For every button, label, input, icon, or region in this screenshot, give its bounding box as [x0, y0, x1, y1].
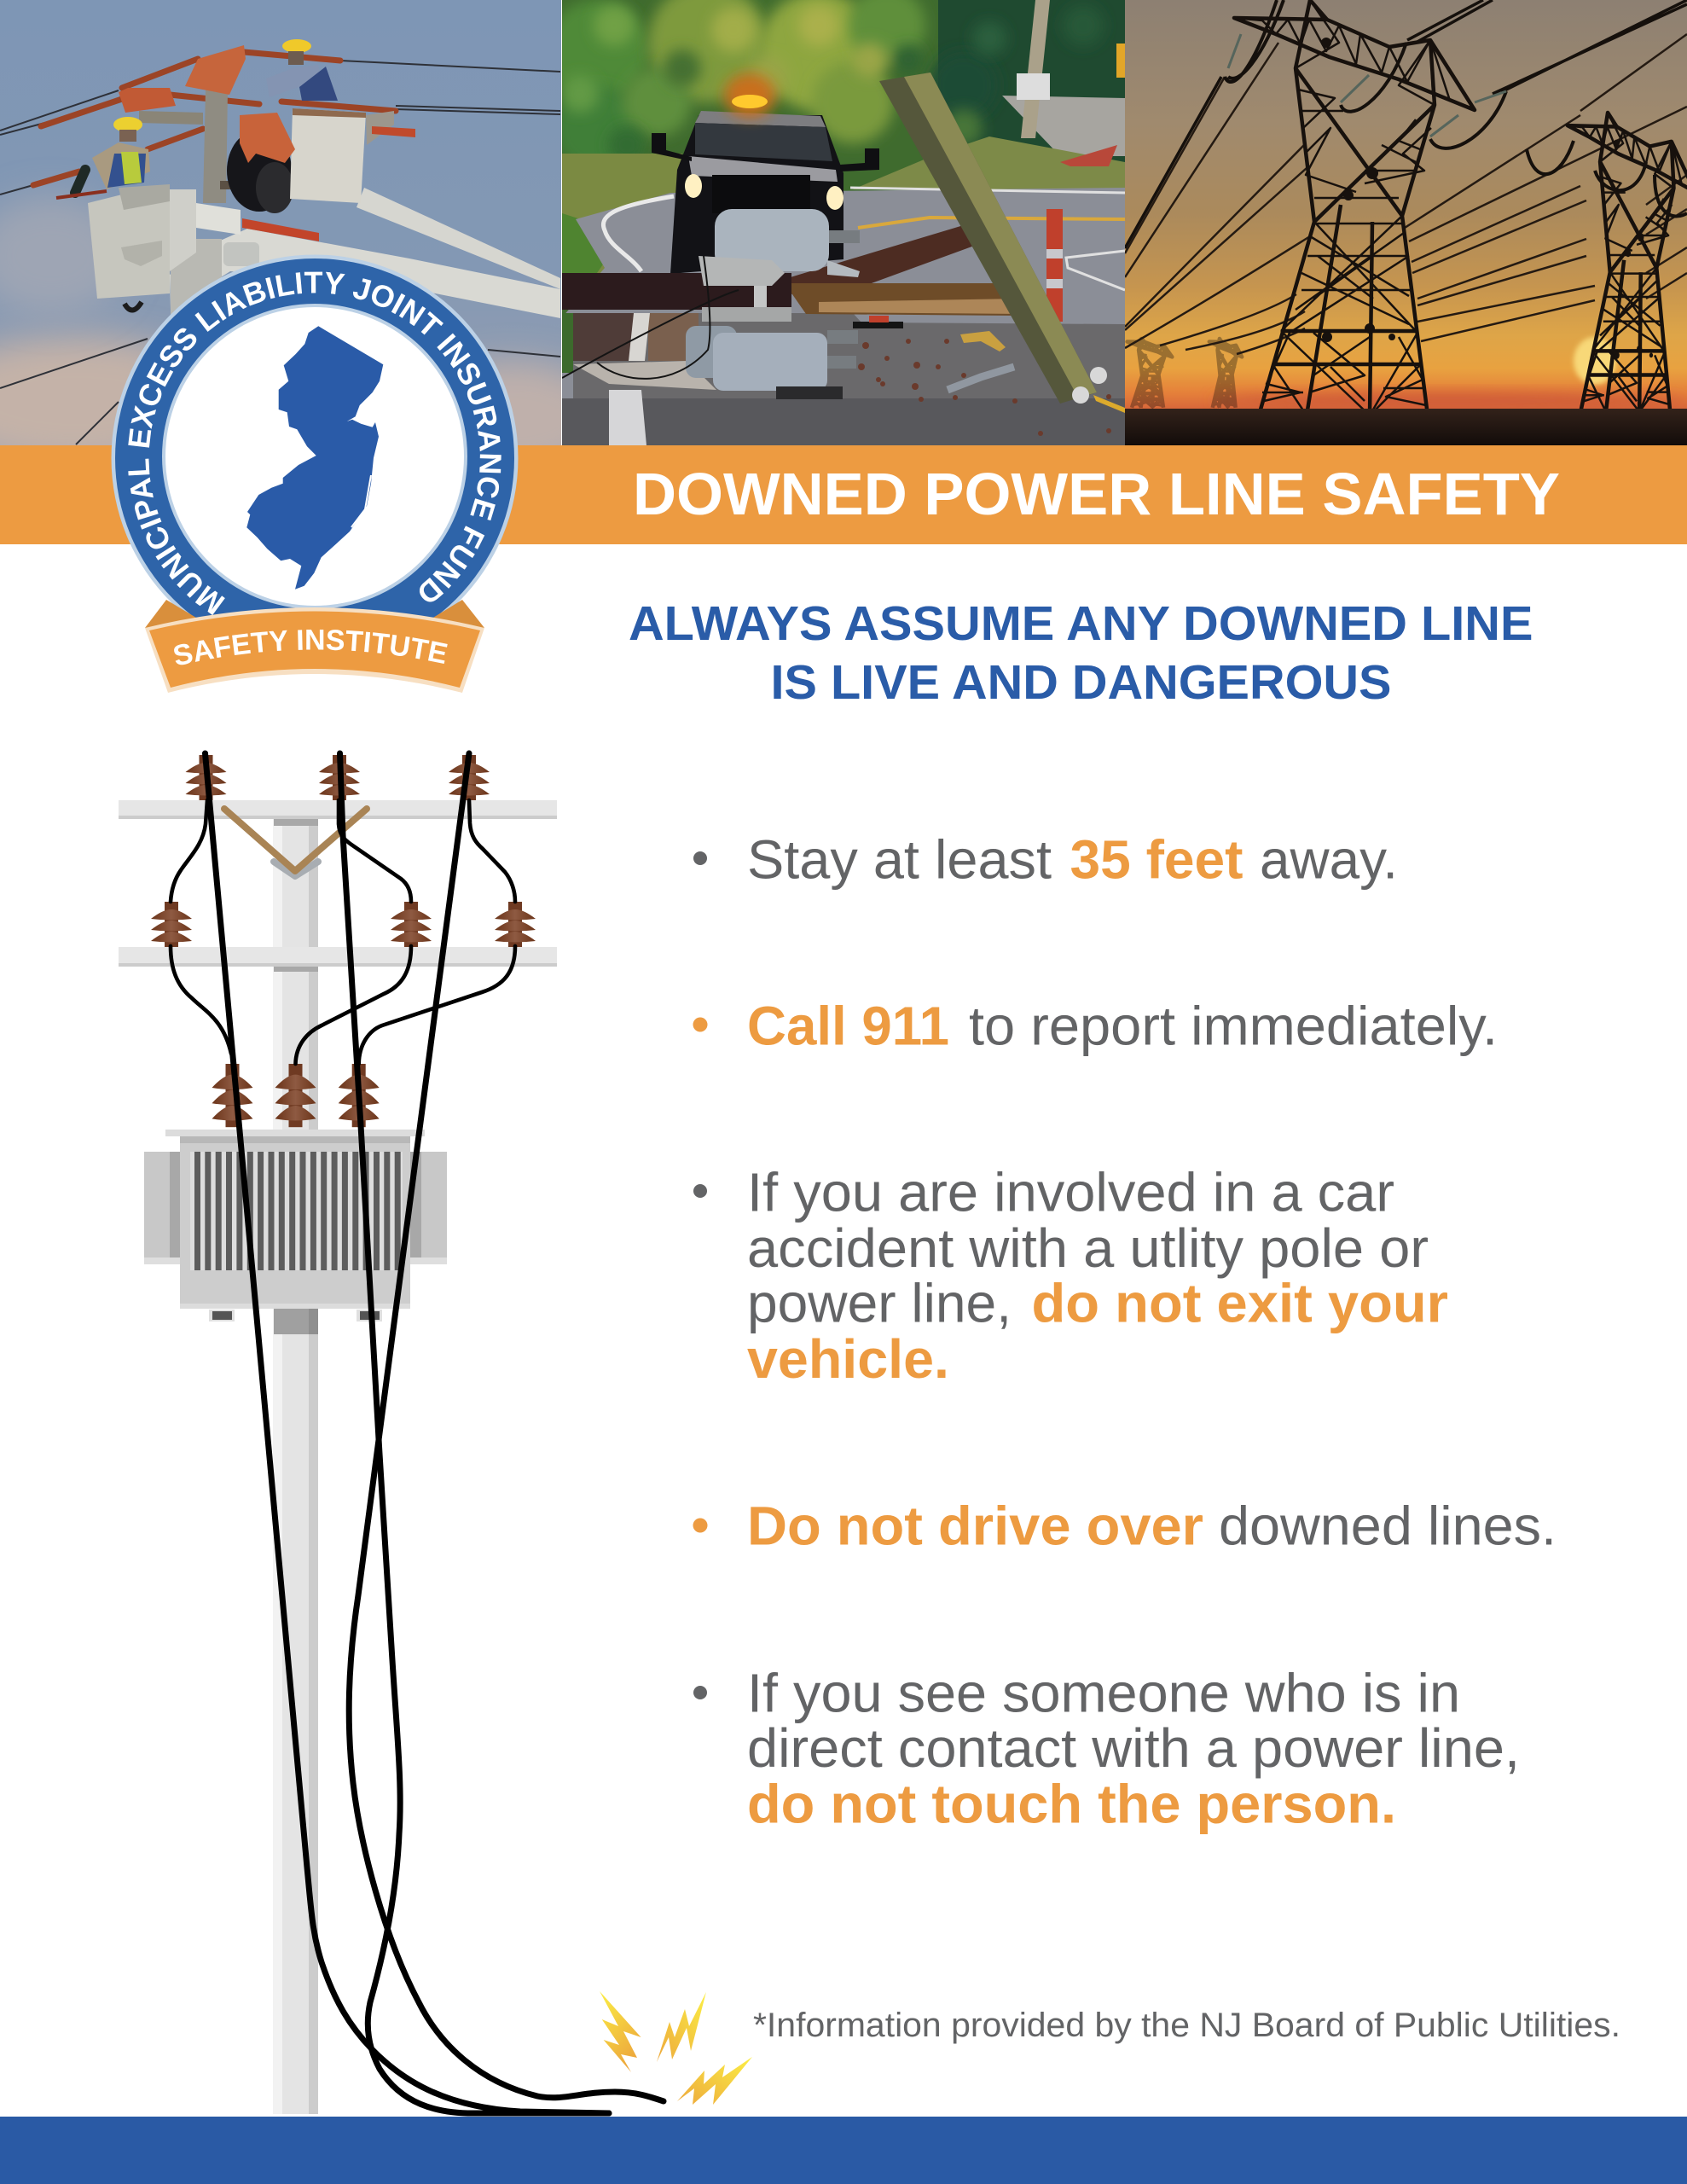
icon: electric sparks	[600, 1991, 752, 2105]
logo ribbon	[145, 600, 484, 693]
crossarms	[119, 800, 557, 967]
bullet: do not drive over	[693, 1495, 1557, 1556]
downed wires	[205, 753, 664, 2113]
bullet: do not drive over: downed lines.	[1219, 1495, 1557, 1556]
logo ring text: MUNICIPAL EXCESS LIABILITY JOINT INSURANCE FUND	[128, 271, 501, 615]
bullet: do not exit vehicle: power line,	[747, 1273, 1012, 1334]
illustration: utility pole with transformer and downed wires	[119, 753, 664, 2114]
subheading: ALWAYS ASSUME ANY DOWNED LINE	[629, 596, 1533, 651]
orange title banner	[0, 445, 1687, 544]
jumper wires	[171, 800, 515, 1064]
bullet: do not touch the person	[693, 1662, 1520, 1834]
subheading	[629, 596, 1533, 710]
photo: downed pole and truck on road	[546, 0, 1125, 445]
photo: line workers in bucket trucks	[0, 0, 561, 445]
bullet: do not exit vehicle: accident with a utlity pole or	[747, 1217, 1429, 1279]
photo: transmission towers at sunset	[1125, 0, 1687, 445]
bullet: call 911	[693, 995, 1498, 1056]
V brace	[224, 809, 367, 876]
bullet: do not exit vehicle: do not exit your	[1032, 1273, 1448, 1334]
blue footer bar	[0, 2117, 1687, 2184]
bullet: do not touch the person: direct contact with a power line,	[747, 1717, 1520, 1779]
bullet: stay away: away.	[1260, 829, 1398, 891]
bullet: do not touch the person: If you see someone who is in	[747, 1662, 1460, 1723]
title: DOWNED POWER LINE SAFETY	[633, 461, 1560, 527]
bullet: stay away	[693, 829, 1398, 891]
insulators	[151, 755, 536, 1127]
bullet: call 911: to report immediately.	[969, 995, 1498, 1056]
logo: New Jersey state shape	[246, 326, 383, 590]
bullet: do not exit vehicle: vehicle.	[747, 1328, 949, 1390]
logo: Municipal Excess Liability Joint Insurance Fund Safety Institute	[111, 254, 519, 693]
transformer	[144, 1130, 447, 1334]
bullet: do not touch the person: do not touch the person.	[747, 1773, 1396, 1834]
debris on road	[858, 334, 1111, 436]
bullet: do not exit vehicle: If you are involved in a car	[747, 1162, 1394, 1223]
ribbon text: SAFETY INSTITUTE	[174, 630, 448, 665]
bullet: call 911: Call 911	[747, 995, 949, 1056]
pole	[273, 819, 318, 2114]
bullet: do not exit vehicle	[693, 1162, 1448, 1390]
subheading: IS LIVE AND DANGEROUS	[771, 655, 1392, 710]
bullet: stay away: 35 feet	[1070, 829, 1244, 891]
footnote: *Information provided by the NJ Board of Public Utilities.	[753, 2007, 1620, 2044]
bullet: do not drive over: Do not drive over	[747, 1495, 1203, 1556]
bullet: stay away: Stay at least	[747, 829, 1052, 891]
